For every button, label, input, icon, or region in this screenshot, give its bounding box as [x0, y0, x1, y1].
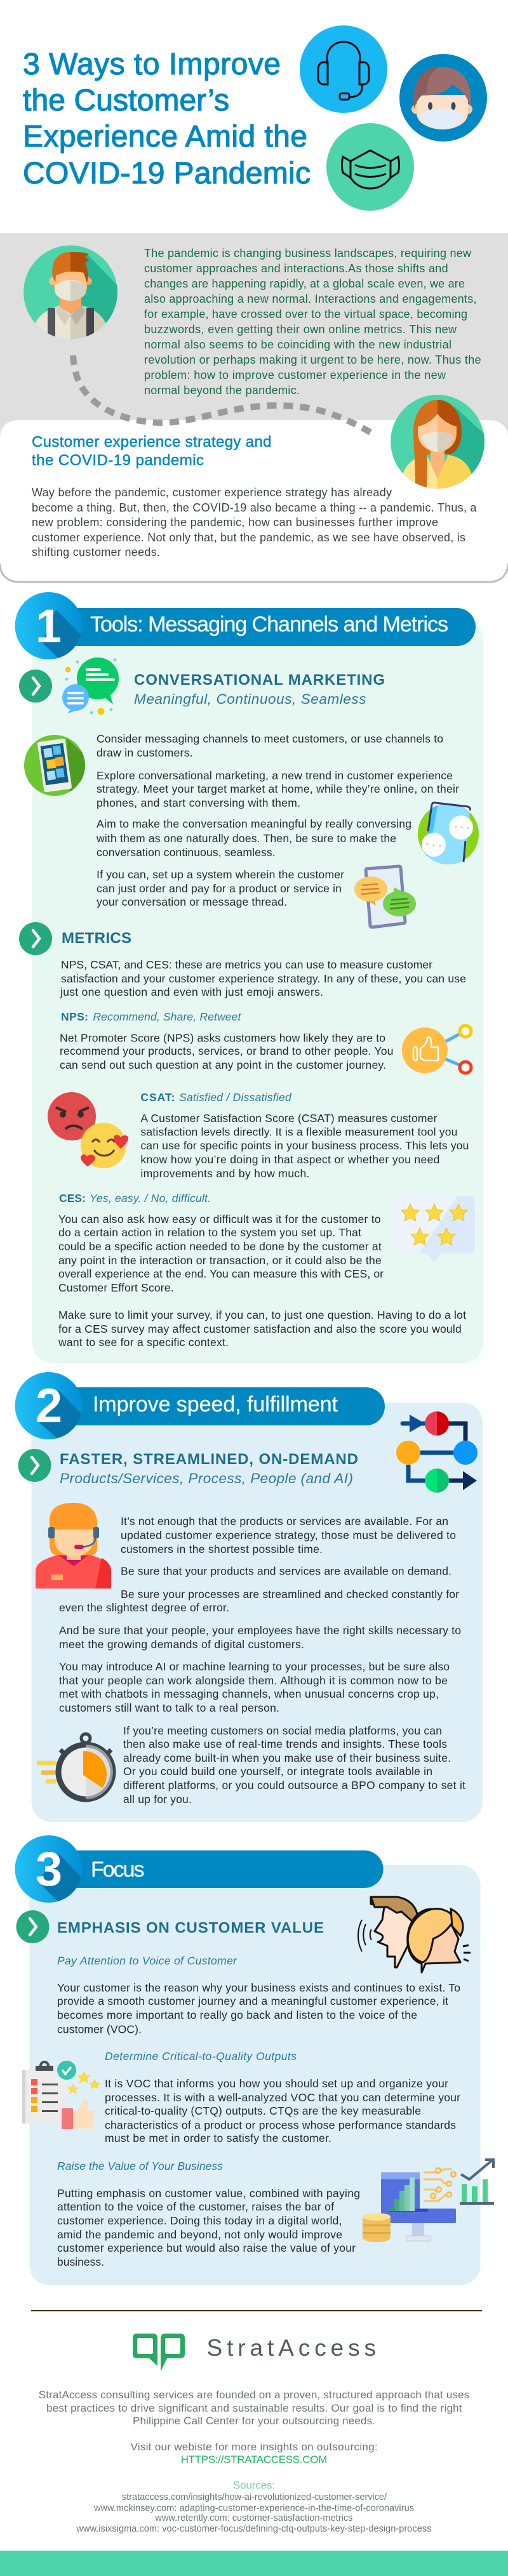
panel: customer experience strategy [0, 420, 508, 582]
banner: section 3 [15, 1835, 384, 1907]
text block: speed and fulfillment: If you’re meeting customers on social media platforms, you can [123, 1724, 442, 1737]
text block: conversational marketing body: with them as one naturally does. Then, be sure to make the [96, 832, 396, 845]
text block: speed and fulfillment: customers in the shortest possible time. [121, 1543, 323, 1556]
heading: faster, streamlined, on-demand: Products/Services, Process, People (and AI) [60, 1470, 353, 1486]
heading: NPS: NPS: [61, 1010, 88, 1023]
text block: speed and fulfillment: You may introduce AI or machine learning to your processes, but be sure also [59, 1660, 450, 1673]
text block: metrics intro: satisfaction and your customer experience strategy. In any of these, you can use [61, 972, 466, 985]
text block: NPS: can send out such question at any point in the customer journey. [60, 1059, 386, 1071]
heading: CES: CES: [59, 1192, 86, 1205]
icon: business value dashboard [363, 2160, 494, 2242]
icon: chevron [19, 670, 52, 703]
title [23, 48, 311, 190]
intro text: The pandemic is changing business landscapes, requiring new [144, 247, 472, 260]
intro text: buzzwords, even getting their own online metrics. This new [144, 323, 457, 336]
text block: sources: www.retently.com: customer-satisfaction-metrics [154, 2513, 352, 2523]
text block: card body: become a thing. But, then, the COVID-19 also became a thing -- a pandemic. Thus, a [32, 501, 477, 514]
text block: speed and fulfillment: meet the growing demands of digital customers. [59, 1638, 304, 1651]
heading: conversational marketing: Meaningful, Continuous, Seamless [134, 691, 366, 707]
text block: sources: strataccess.com/insights/how-ai-revolutionized-customer-service/ [122, 2492, 387, 2502]
text block: survey advice: Make sure to limit your survey, if you can, to just one question. Having to do a lot [58, 1309, 466, 1321]
dashed connector [73, 355, 375, 435]
text block: card body [32, 486, 477, 558]
text block: NPS: Net Promoter Score (NPS) asks customers how likely they are to [60, 1032, 385, 1045]
icon: angry and happy emoji [48, 1092, 128, 1168]
text block: NPS: recommend your products, services, or brand to other people. You [60, 1045, 394, 1057]
footer band [0, 2551, 508, 2576]
text block: card body: shifting customer needs. [32, 546, 160, 558]
text block: metrics intro: NPS, CSAT, and CES: these are metrics you can use to measure customer [61, 958, 432, 971]
text block: raise the value: customer experience but would also raise the value of your [57, 2242, 356, 2254]
intro text: customer approaches and interactions.As those shifts and [144, 262, 448, 275]
heading: conversational marketing [134, 671, 385, 707]
banner: section 1 [15, 592, 476, 663]
text block: raise the value: Putting emphasis on customer value, combined with paying [57, 2187, 360, 2200]
title: Experience Amid the [23, 120, 307, 154]
text block: speed and fulfillment [59, 1515, 465, 1806]
avatar: man with mask [23, 245, 121, 343]
text block: CES: You can also ask how easy or difficult was it for the customer to [58, 1213, 381, 1225]
icon: chevron [19, 922, 52, 955]
text block: CTQ outputs: must be met in order to satisfy the customer. [105, 2132, 331, 2144]
heading: pay attention: Pay Attention to Voice of Customer [57, 1955, 237, 1967]
avatar: woman with mask [391, 395, 485, 489]
text block: sources: www.isixsigma.com: voc-customer-focus/defining-ctq-outputs-key-step-design-process [76, 2524, 431, 2534]
icon: phone with orange and green messages [354, 866, 416, 927]
heading: CSAT: CSAT: [140, 1091, 175, 1104]
text block: CSAT: can use for specific points in your business process. This lets you [140, 1139, 469, 1152]
banner: section 2 [15, 1372, 385, 1444]
text block: metrics intro [60, 958, 466, 998]
heading: raise the value: Raise the Value of Your Business [57, 2160, 223, 2172]
text block: raise the value [57, 2187, 360, 2268]
text block: metrics intro: just one question and even with just emoji answers. [60, 986, 323, 998]
intro text: normal also seems to be coinciding with the new industrial [144, 338, 451, 351]
text block: CTQ outputs [105, 2077, 460, 2144]
text block: CES: overall experience at the end. You can measure this with CES, or [58, 1267, 384, 1280]
text block: CSAT: improvements and by how much. [140, 1167, 309, 1180]
icon: face mask [326, 123, 414, 211]
text block: CSAT [140, 1112, 469, 1180]
text block: voice of customer: provide a smooth customer journey and a meaningful customer experience, it [57, 1995, 448, 2007]
text block: about StratAccess: Philippine Call Center for your outsourcing needs. [133, 2415, 375, 2427]
text block: CTQ outputs: processes. It is with a well-analyzed VOC that you can determine your [105, 2091, 460, 2104]
text block: speed and fulfillment: even the slightest degree of error. [59, 1601, 229, 1614]
text block: CES: Customer Effort Score. [58, 1281, 174, 1294]
icon: star rating bubble [394, 1196, 475, 1262]
text block: conversational marketing body: draw in customers. [97, 746, 193, 759]
text block: about StratAccess [39, 2389, 469, 2427]
icon: process flow [396, 1411, 478, 1493]
text block: speed and fulfillment: then also make use of real-time trends and insights. These tools [123, 1738, 447, 1750]
text block: survey advice: for a CES survey may affect customer satisfaction and also the score you would [58, 1323, 462, 1335]
text block: speed and fulfillment: Be sure your processes are streamlined and checked constantly for [121, 1588, 459, 1601]
title: COVID-19 Pandemic [23, 157, 311, 190]
icon: chat bubbles [62, 657, 119, 715]
text block: speed and fulfillment: updated customer experience strategy, those must be delivered to [121, 1529, 456, 1542]
text block: sources: Sources: [233, 2480, 275, 2492]
text block: about StratAccess: StratAccess consulting services are founded on a proven, structured approach that uses [39, 2389, 469, 2401]
heading: customer experience strategy: the COVID-19 pandemic [32, 452, 204, 469]
intro text: problem: how to improve customer experience in the new [144, 369, 446, 381]
text block: card body: customer experience. Not only that, but the pandemic, as we see have observed, is [32, 531, 465, 544]
icon: stopwatch [37, 1734, 113, 1799]
text block: speed and fulfillment: And be sure that your people, your employees have the right skills necessary to [59, 1624, 461, 1637]
intro text: revolution or perhaps making it urgent to be here, now. Thus the [144, 353, 481, 366]
text block: survey advice [58, 1309, 466, 1349]
panel: section 1 background [32, 619, 483, 1363]
heading: customer experience strategy [32, 433, 272, 469]
intro text [144, 247, 481, 397]
text block: speed and fulfillment: that your people can work alongside them. Although it is common now to be [59, 1674, 448, 1687]
text block: conversational marketing body: phones, and start conversing with them. [97, 796, 300, 809]
intro text: also approaching a new normal. Interactions and engagements, [144, 293, 476, 305]
text block: speed and fulfillment: different platforms, or you could outsource a BPO company to set it [123, 1779, 465, 1792]
title: the Customer’s [23, 84, 229, 117]
text block: website: Visit our webiste for more insights on outsourcing: [131, 2441, 378, 2453]
icon: boy wearing mask [399, 54, 487, 142]
text block: conversational marketing body: Consider messaging channels to meet customers, or use channels to [97, 732, 443, 745]
text block: conversational marketing body: If you can, set up a system wherein the customer [97, 868, 344, 881]
heading: faster, streamlined, on-demand: FASTER, STREAMLINED, ON-DEMAND [60, 1451, 358, 1468]
banner: section 3: Focus [91, 1858, 145, 1882]
text block: conversational marketing body: can just order and pay for a product or service in [97, 882, 342, 895]
text block: conversational marketing body: conversation continuous, seamless. [97, 846, 276, 859]
banner: section 3: 3 [36, 1842, 62, 1896]
icon: chevron [18, 1449, 51, 1482]
icon: chevron [17, 1910, 50, 1943]
text block: website: HTTPS://STRATACCESS.COM [181, 2454, 327, 2466]
text block: speed and fulfillment: met with chatbots in messaging channels, when unusual concerns crop up, [59, 1688, 439, 1700]
text block: speed and fulfillment: Be sure that your products and services are available on demand. [121, 1565, 451, 1578]
icon: thumbs up share [402, 1026, 471, 1073]
text block: website [131, 2441, 378, 2466]
heading: NPS: Recommend, Share, Retweet [93, 1010, 242, 1023]
text block: CTQ outputs: It is VOC that informs you how you should set up and organize your [105, 2077, 448, 2090]
banner: section 1: Tools: Messaging Channels and Metrics [90, 612, 448, 637]
text block: CES [58, 1213, 384, 1294]
text block: speed and fulfillment: It’s not enough that the products or services are available. For an [121, 1515, 448, 1528]
intro text: for example, have crossed over to the virtual space, becoming [144, 308, 467, 320]
text block: CTQ outputs: critical-to-quality (CTQ) outputs. CTQs are the key measurable [105, 2104, 421, 2117]
text block: survey advice: want to see for a specific context. [58, 1336, 229, 1349]
text block: conversational marketing body: Aim to make the conversation meaningful by really conversing [97, 817, 411, 830]
icon: phone in green circle [24, 735, 85, 796]
logo: StratAccess: StratAccess [207, 2335, 376, 2361]
icon: blue phone with speech bubbles [418, 803, 479, 869]
text block: card body: Way before the pandemic, customer experience strategy has already [32, 486, 392, 499]
text block: speed and fulfillment: Or you could build one yourself, or integrate tools available in [123, 1765, 432, 1778]
text block: voice of customer [57, 1981, 460, 2036]
heading: faster, streamlined, on-demand [60, 1451, 358, 1486]
text block: CSAT: satisfaction levels directly. It is a flexible measurement tool you [140, 1125, 457, 1138]
banner: section 2: 2 [36, 1379, 62, 1433]
text block: raise the value: amid the pandemic and beyond, not only would improve [57, 2228, 342, 2241]
icon: two talking heads [358, 1897, 471, 1972]
text block: CSAT: know how you’re doing in that aspect or whether you need [140, 1153, 439, 1166]
text block: CES: any point in the interaction or transaction, or it could also be the [58, 1254, 382, 1267]
text block: voice of customer: Your customer is the reason why your business exists and continues to exist. To [57, 1981, 460, 1994]
text block: raise the value: business. [57, 2256, 104, 2268]
text block: CSAT: A Customer Satisfaction Score (CSAT) measures customer [140, 1112, 438, 1125]
heading: CSAT: Satisfied / Dissatisfied [179, 1091, 292, 1104]
text block: CES: could be a specific action needed to be done by the customer at [58, 1240, 382, 1253]
heading: metrics: METRICS [62, 930, 131, 947]
heading: determine CTQ: Determine Critical-to-Quality Outputs [105, 2050, 297, 2063]
icon: headset [300, 25, 387, 113]
heading: conversational marketing: CONVERSATIONAL MARKETING [134, 671, 385, 689]
heading: emphasis on customer value: EMPHASIS ON CUSTOMER VALUE [57, 1919, 324, 1937]
intro text: normal beyond the pandemic. [144, 384, 300, 397]
text block: raise the value: customer experience. Doing this today in a digital world, [57, 2214, 342, 2227]
text block: card body: new problem: considering the pandemic, how can businesses further improve [32, 516, 438, 529]
text block: about StratAccess: best practices to drive significant and sustainable results. Our goal is to find the right [46, 2402, 462, 2414]
banner: section 1: 1 [36, 600, 62, 652]
text block: conversational marketing body [96, 732, 459, 908]
text block: CES: do a certain action in relation to the system you set up. That [58, 1226, 361, 1239]
divider rule [31, 2310, 482, 2311]
text block: sources [76, 2480, 431, 2534]
panel: section 3 background [29, 1865, 481, 2285]
heading: customer experience strategy: Customer experience strategy and [32, 433, 272, 451]
text block: speed and fulfillment: already come built-in when you make use of their business suite. [123, 1752, 451, 1764]
text block: speed and fulfillment: all up for you. [123, 1793, 192, 1806]
title: 3 Ways to Improve [23, 48, 281, 81]
text block: NPS [60, 1032, 394, 1071]
text block: sources: www.mckinsey.com: adapting-customer-experience-in-the-time-of-coronavirus [93, 2504, 414, 2514]
text block: voice of customer: becomes more important to really go back and listen to the voice of the [57, 2009, 417, 2021]
text block: voice of customer: customer (VOC). [57, 2023, 142, 2036]
intro text: changes are happening rapidly, at a global scale even, we are [144, 277, 465, 290]
heading: CES: Yes, easy. / No, difficult. [90, 1192, 211, 1205]
text block: CTQ outputs: characteristics of a product or process whose performance standards [105, 2118, 456, 2131]
panel: section 2 background [32, 1403, 483, 1822]
text block: raise the value: attention to the voice of the customer, raises the bar of [57, 2200, 334, 2213]
panel: introduction [0, 233, 508, 452]
text block: conversational marketing body: Explore conversational marketing, a new trend in customer experience [97, 769, 453, 782]
text block: conversational marketing body: strategy. Meet your target market at home, while they’re online, on their [97, 783, 459, 795]
text block: conversational marketing body: your conversation or message thread. [97, 895, 287, 908]
icon: checklist and thumbs up [22, 2061, 100, 2129]
icon: call center agent [36, 1503, 111, 1589]
logo: StratAccess [133, 2334, 376, 2372]
banner: section 2: Improve speed, fulfillment [93, 1392, 338, 1417]
text block: speed and fulfillment: customers still want to talk to a real person. [59, 1701, 279, 1714]
